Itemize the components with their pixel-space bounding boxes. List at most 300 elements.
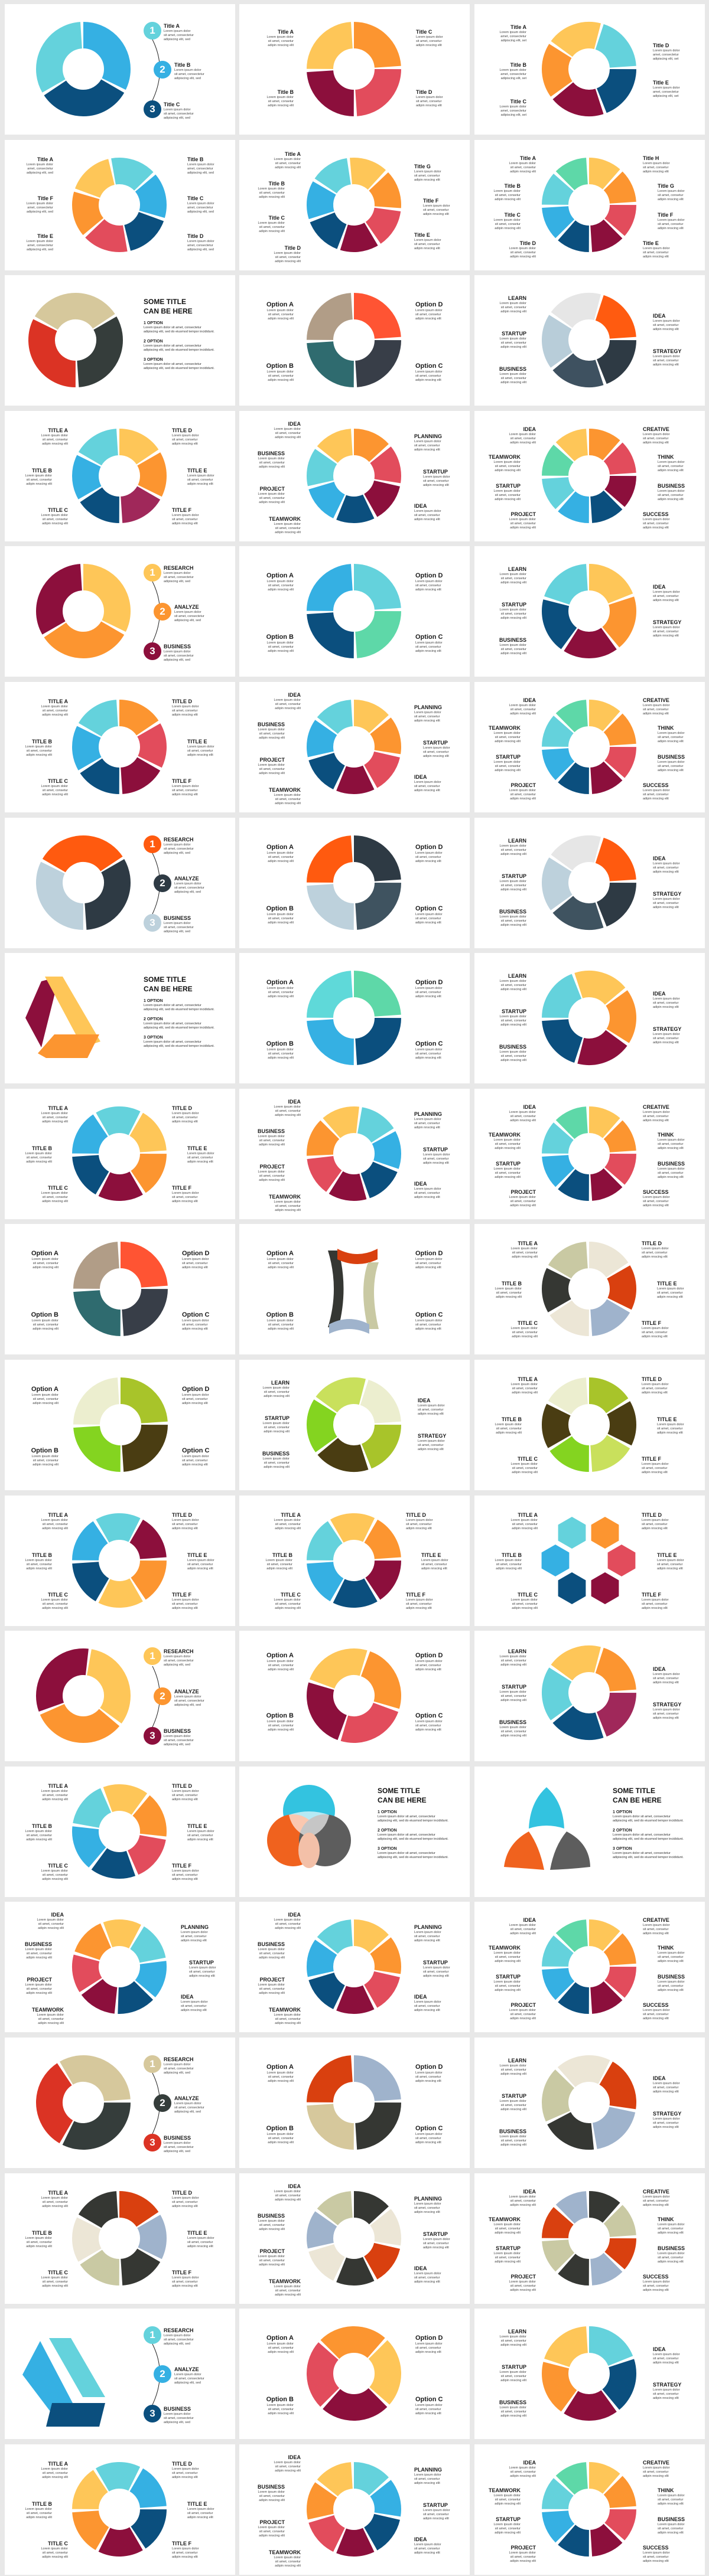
label: Title A: Lorem ipsum dolor [164, 30, 191, 33]
label: IDEA 2: adipin nnscing elit [414, 2280, 440, 2284]
label: Option D: Lorem ipsum dolor [415, 309, 443, 312]
label: Option A: Option A [266, 1652, 294, 1659]
label: STARTUP: adipin nnscing elit [495, 2260, 521, 2264]
label: Title A [499, 24, 526, 43]
slide 10: 6-step swirl [5, 411, 235, 541]
label: Title C [187, 195, 214, 214]
label: TITLE F: sit amet, consetur [172, 1873, 197, 1877]
label: STRATEGY: Lorem ipsum dolor [653, 626, 680, 629]
label: IDEA: Lorem ipsum dolor [653, 590, 680, 594]
label: IDEA: IDEA [51, 1912, 64, 1918]
label: TITLE C [510, 1456, 538, 1474]
label: TITLE A [41, 1783, 68, 1801]
label: BUSINESS [258, 1941, 285, 1960]
label: STRATEGY: sit amet, consetur [653, 630, 678, 634]
label: PROJECT: PROJECT [510, 2274, 536, 2280]
label: Option C: Option C [415, 1311, 443, 1318]
label: Title A: Title A [278, 29, 294, 35]
label: Option A [266, 1250, 294, 1269]
label: Option C: sit amet, consetur [415, 917, 441, 920]
label: TEAMWORK: adipin nnscing elit [275, 802, 301, 805]
label: Option A: adipin nnscing elit [268, 1266, 294, 1269]
label: IDEA 2: Lorem ipsum dolor [414, 2543, 441, 2546]
label: ANALYZE: ANALYZE [174, 2366, 199, 2372]
number 2 [154, 61, 171, 79]
label: STARTUP: adipin nnscing elit [500, 2379, 526, 2382]
label: IDEA: IDEA [653, 2075, 666, 2081]
label: ANALYZE: sit amet, consectetur [174, 615, 204, 618]
label: IDEA: Lorem ipsum dolor [274, 698, 301, 702]
label: TITLE A: adipin nnscing elit [42, 2205, 68, 2208]
label: SUCCESS: Lorem ipsum dolor [643, 2280, 670, 2284]
ring diagram [474, 953, 705, 1083]
label: TITLE B: sit amet, consetur [27, 478, 52, 482]
label: PLANNING: Lorem ipsum dolor [414, 2202, 441, 2206]
label: TITLE A [274, 1512, 301, 1530]
label: Title D: sit amet, consetur [510, 251, 536, 254]
label: PROJECT: adipin nnscing elit [510, 2288, 536, 2292]
label: CREATIVE: Lorem ipsum dolor [643, 2195, 670, 2199]
label: Option B: Option B [266, 2125, 294, 2132]
label: BUSINESS: BUSINESS [499, 366, 526, 372]
slide 30: 6 petal ring [474, 1224, 705, 1354]
label: TITLE B: TITLE B [32, 2501, 52, 2507]
label: TITLE F: Lorem ipsum dolor [642, 1327, 669, 1330]
label: STARTUP: sit amet, consetur [501, 1695, 526, 1698]
title and options: adipiscing elit, sed do eiusmod tempor incididunt. [378, 1818, 448, 1822]
number 3: 3 [149, 1730, 155, 1741]
label: TITLE E: Lorem ipsum dolor [187, 474, 214, 478]
label: PROJECT: adipin nnscing elit [510, 2559, 536, 2563]
ring diagram [5, 1224, 235, 1354]
label: BUSINESS [499, 1044, 526, 1062]
label: Option C: adipin nnscing elit [415, 1327, 441, 1331]
label: Title C [416, 29, 443, 47]
label: PROJECT: sit amet, consetur [259, 768, 285, 771]
label: STARTUP: adipin nnscing elit [495, 769, 521, 772]
label: THINK: adipin nnscing elit [658, 2502, 684, 2506]
label: Option C: sit amet, consetur [415, 1323, 441, 1327]
label: SUCCESS: SUCCESS [643, 2545, 669, 2551]
label: ANALYZE: Lorem ipsum dolor [174, 2373, 201, 2376]
label: Option B [31, 1447, 58, 1467]
title and options: 1 OPTION [613, 1810, 632, 1814]
label: BUSINESS [658, 2516, 685, 2535]
label: PROJECT: Lorem ipsum dolor [509, 2551, 536, 2555]
label: BUSINESS: adipin nnscing elit [259, 465, 285, 469]
label: TEAMWORK: TEAMWORK [269, 787, 301, 793]
label: Option D: adipin nnscing elit [415, 1668, 441, 1671]
label: Title C: Title C [505, 212, 521, 218]
slide 33: 6 green waves [474, 1360, 705, 1490]
label: TITLE C: adipin nnscing elit [42, 793, 68, 796]
label: TITLE C [41, 1592, 68, 1610]
label: PLANNING: adipin nnscing elit [414, 2211, 440, 2214]
label: PLANNING [181, 1924, 209, 1942]
label: Title D: sit amet, consetur [275, 256, 301, 259]
title and options: adipiscing elit, sed do eiusmod tempor incididunt. [144, 1026, 214, 1030]
label: STARTUP: Lorem ipsum dolor [262, 1422, 290, 1425]
label: Option B: adipin nnscing elit [32, 1327, 58, 1331]
label: BUSINESS [164, 644, 194, 662]
label: Option B: adipin nnscing elit [268, 1728, 294, 1732]
label: IDEA: IDEA [523, 1917, 536, 1923]
label: STARTUP: Lorem ipsum dolor [423, 475, 450, 479]
title and options: 2 OPTION [378, 1829, 397, 1833]
label: Title F [658, 212, 685, 230]
label: TITLE C: TITLE C [48, 2541, 68, 2546]
label: IDEA: adipin nnscing elit [275, 1927, 301, 1930]
label: IDEA 2: Lorem ipsum dolor [414, 2272, 441, 2275]
label: LEARN: sit amet, consetur [501, 2068, 526, 2072]
label: Option C [415, 1040, 443, 1060]
label: TITLE F: sit amet, consetur [642, 1331, 667, 1334]
label: PROJECT [258, 1164, 285, 1182]
label: STARTUP: Lorem ipsum dolor [189, 1966, 216, 1970]
label: Title G: Title G [658, 183, 674, 189]
label: IDEA 2: adipin nnscing elit [414, 2009, 440, 2012]
label: SUCCESS: SUCCESS [643, 2002, 669, 2008]
label: Option C: sit amet, consetur [415, 1724, 441, 1728]
label: TITLE C: TITLE C [518, 1592, 538, 1598]
label: STARTUP: sit amet, consetur [501, 1019, 526, 1023]
label: LEARN: adipin nnscing elit [500, 1663, 526, 1667]
slide 50: 7 swirl [239, 2173, 470, 2304]
label: TITLE C [41, 507, 68, 525]
label: TITLE F: adipin nnscing elit [172, 793, 198, 796]
label: PROJECT: adipin nnscing elit [259, 501, 285, 504]
slide 18: 8-piece puzzle [474, 682, 705, 812]
label: TEAMWORK: Lorem ipsum dolor [493, 1138, 521, 1142]
label: THINK: THINK [658, 2487, 674, 2493]
label: THINK: sit amet, consetur [658, 2227, 683, 2231]
title and options: Lorem ipsum dolor sit amet, consectetur [378, 1852, 435, 1855]
label: Title B: Title B [269, 181, 285, 187]
label: STARTUP: STARTUP [496, 1974, 521, 1980]
number 1 [144, 835, 161, 853]
label: TITLE B: Lorem ipsum dolor [495, 1287, 522, 1291]
label: THINK: adipin nnscing elit [658, 740, 684, 743]
label: IDEA: adipin nnscing elit [653, 870, 679, 874]
label: TITLE A: sit amet, consetur [43, 2200, 68, 2204]
label: THINK: THINK [658, 2216, 674, 2222]
label: TITLE F [642, 1320, 669, 1338]
label: Option C: Option C [415, 634, 443, 641]
label: ANALYZE [174, 2366, 204, 2385]
label: PROJECT: sit amet, consetur [510, 793, 536, 796]
slide 3: 5-step ring [474, 4, 705, 135]
label: TITLE A: TITLE A [48, 1105, 68, 1111]
label: IDEA 2: IDEA [414, 2536, 427, 2542]
label: TITLE E: adipin nnscing elit [657, 1295, 683, 1299]
label: IDEA 2: sit amet, consetur [414, 2276, 440, 2280]
label: TITLE D: sit amet, consetur [172, 2471, 197, 2475]
label: BUSINESS: sit amet, consectetur [164, 654, 194, 658]
label: TITLE D: Lorem ipsum dolor [642, 1247, 669, 1251]
label: TITLE A [41, 2190, 68, 2208]
label: Option D: sit amet, consetur [415, 584, 441, 587]
label: TITLE E: sit amet, consetur [187, 1834, 213, 1837]
label: LEARN: LEARN [271, 1380, 290, 1386]
label: PLANNING: sit amet, consetur [414, 715, 440, 719]
label: TEAMWORK [489, 454, 521, 472]
label: Option A: adipin nnscing elit [268, 588, 294, 592]
label: TITLE E [187, 739, 214, 757]
slide 53: 4 blocks options [239, 2309, 470, 2439]
label: Option A: adipin nnscing elit [268, 995, 294, 998]
label: STARTUP: sit amet, consetur [501, 884, 526, 887]
label: ANALYZE: sit amet, consectetur [174, 886, 204, 890]
label: LEARN: LEARN [508, 566, 526, 572]
label: LEARN [499, 566, 526, 585]
label: LEARN: sit amet, consetur [264, 1390, 290, 1394]
label: Option D: Option D [415, 1652, 443, 1659]
label: IDEA 2: IDEA [414, 1994, 427, 2000]
label: TITLE F [172, 1863, 199, 1881]
label: THINK [658, 1945, 685, 1963]
title and options: adipiscing elit, sed do eiusmod tempor incididunt. [144, 329, 214, 333]
label: Title D [416, 89, 443, 107]
label: IDEA 2: adipin nnscing elit [414, 789, 440, 792]
label: STARTUP: Lorem ipsum dolor [493, 489, 521, 493]
label: Title E: sit amet, consetur [414, 243, 440, 246]
label: Option C: adipin nnscing elit [182, 1327, 208, 1331]
label: BUSINESS: adipin nnscing elit [658, 1176, 684, 1179]
label: Option C: sit amet, consetur [415, 2137, 441, 2140]
label: Title C: adipiscing elit, sed [164, 116, 190, 120]
label: CREATIVE [643, 426, 670, 445]
label: Option B: Lorem ipsum dolor [266, 2133, 294, 2136]
label: TITLE D: adipin nnscing elit [642, 1527, 668, 1530]
title and options: Lorem ipsum dolor sit amet, consectetur [144, 326, 201, 329]
title and options: adipiscing elit, sed do eiusmod tempor incididunt. [144, 1007, 214, 1011]
label: BUSINESS: Lorem ipsum dolor [258, 457, 285, 461]
label: TITLE A: Lorem ipsum dolor [41, 705, 68, 709]
label: STRATEGY: STRATEGY [653, 891, 681, 897]
label: Option D [415, 2335, 443, 2354]
label: TITLE A: Lorem ipsum dolor [510, 1383, 538, 1386]
label: BUSINESS: BUSINESS [658, 1161, 685, 1167]
label: Title A [26, 156, 53, 175]
label: Option D: Option D [415, 572, 443, 579]
slide 1: 3-step ring with numbered list [5, 4, 235, 135]
label: TITLE C: sit amet, consetur [43, 1602, 68, 1606]
label: PROJECT: Lorem ipsum dolor [258, 2526, 285, 2529]
label: Option C [415, 1311, 443, 1331]
label: IDEA 2: IDEA [181, 1994, 194, 2000]
label: TITLE B: TITLE B [32, 468, 52, 474]
label: TEAMWORK: Lorem ipsum dolor [274, 2285, 301, 2288]
label: Option B: Lorem ipsum dolor [31, 1455, 58, 1458]
label: STARTUP [423, 1960, 450, 1978]
label: IDEA: IDEA [653, 584, 666, 590]
label: Option C: sit amet, consetur [415, 2408, 441, 2411]
slide 21: yin-yang 5 learn [474, 818, 705, 948]
label: TITLE B: adipin nnscing elit [26, 2516, 52, 2519]
label: TITLE E: adipin nnscing elit [657, 1567, 683, 1571]
label: STARTUP: STARTUP [502, 873, 526, 879]
label: TITLE B [25, 1823, 52, 1842]
label: SUCCESS: sit amet, consetur [643, 2555, 668, 2559]
label: SUCCESS: Lorem ipsum dolor [643, 1196, 670, 1199]
label: TITLE A: sit amet, consetur [512, 1251, 538, 1255]
label: STRATEGY: adipin nnscing elit [653, 363, 679, 367]
label: TITLE B: Lorem ipsum dolor [25, 745, 52, 749]
label: Option D: Option D [415, 301, 443, 308]
label: LEARN: Lorem ipsum dolor [499, 2335, 526, 2339]
label: IDEA [509, 1917, 536, 1935]
label: TEAMWORK: sit amet, consetur [38, 2017, 64, 2021]
label: Title D: adipin nnscing elit [510, 255, 536, 259]
label: TITLE B: TITLE B [32, 1145, 52, 1151]
label: TITLE D: adipin nnscing elit [642, 1391, 668, 1395]
label: TITLE F [642, 1456, 669, 1474]
number 2 [154, 2365, 171, 2383]
slide 37: 3 arrows with numbered list [5, 1631, 235, 1761]
number 3 [144, 914, 161, 932]
label: IDEA: sit amet, consetur [653, 1677, 678, 1680]
title and options: Lorem ipsum dolor sit amet, consectetur [378, 1815, 435, 1818]
label: BUSINESS: Lorem ipsum dolor [258, 1135, 285, 1138]
label: IDEA [274, 1099, 301, 1117]
label: Option A: Lorem ipsum dolor [266, 1660, 294, 1663]
label: Option B: sit amet, consetur [268, 1724, 294, 1728]
label: IDEA 2 [414, 774, 441, 792]
label: STARTUP: STARTUP [423, 1147, 448, 1152]
ring diagram [239, 953, 470, 1083]
label: IDEA: Lorem ipsum dolor [653, 2353, 680, 2356]
label: STARTUP: STARTUP [496, 2516, 521, 2522]
label: IDEA: adipin nnscing elit [418, 1412, 444, 1416]
label: IDEA 2: adipin nnscing elit [414, 2551, 440, 2555]
label: TITLE D: sit amet, consetur [642, 1523, 667, 1526]
label: Option C: Lorem ipsum dolor [415, 1319, 443, 1323]
label: STARTUP: sit amet, consetur [423, 479, 448, 483]
label: IDEA: adipin nnscing elit [510, 1932, 536, 1935]
label: Title D [187, 233, 214, 252]
label: BUSINESS: Lorem ipsum dolor [262, 1457, 290, 1461]
label: IDEA: IDEA [288, 2183, 301, 2189]
label: Option D: sit amet, consetur [415, 991, 441, 994]
label: TITLE A: TITLE A [48, 1783, 68, 1789]
label: IDEA [653, 584, 680, 602]
label: Title E [643, 240, 670, 259]
label: Title E: amet, consectetur [27, 244, 53, 247]
slide 44: 7 faceted blocks [239, 1902, 470, 2032]
label: IDEA: sit amet, consetur [510, 1928, 536, 1931]
label: TITLE F: adipin nnscing elit [172, 522, 198, 525]
label: RESEARCH: RESEARCH [164, 565, 194, 571]
label: BUSINESS: Lorem ipsum dolor [658, 489, 685, 493]
label: RESEARCH: Lorem ipsum dolor [164, 2334, 191, 2337]
label: Option B: Option B [31, 1447, 58, 1454]
label: Title E: Lorem ipsum dolor [643, 247, 670, 250]
ring diagram [542, 21, 636, 117]
label: LEARN: Lorem ipsum dolor [499, 302, 526, 305]
label: Option B [266, 634, 294, 653]
label: STARTUP: Lorem ipsum dolor [499, 337, 526, 341]
title and options: adipiscing elit, sed do eiusmod tempor incididunt. [613, 1818, 684, 1822]
label: TITLE D [172, 1783, 199, 1801]
title and options: Lorem ipsum dolor sit amet, consectetur [613, 1852, 671, 1855]
label: TITLE E: TITLE E [421, 1552, 441, 1558]
label: STARTUP: adipin nnscing elit [500, 888, 526, 892]
label: STARTUP: adipin nnscing elit [423, 755, 449, 758]
venn diagram [239, 1767, 470, 1897]
label: TITLE F: Lorem ipsum dolor [642, 1462, 669, 1466]
petals diagram [474, 1767, 705, 1897]
label: IDEA: adipin nnscing elit [275, 707, 301, 710]
label: LEARN: adipin nnscing elit [500, 2072, 526, 2076]
label: TITLE A: TITLE A [518, 1512, 538, 1518]
label: TITLE C: Lorem ipsum dolor [41, 2547, 68, 2551]
slide 14: 4-piece puzzle [239, 546, 470, 677]
label: TITLE B: adipin nnscing elit [266, 1567, 292, 1571]
label: CREATIVE: sit amet, consetur [643, 1928, 668, 1931]
label: LEARN [499, 2058, 526, 2076]
label: PROJECT: Lorem ipsum dolor [258, 492, 285, 496]
label: TITLE D: TITLE D [406, 1512, 426, 1518]
ring diagram [5, 1089, 235, 1219]
title and options: Lorem ipsum dolor sit amet, consectetur [144, 1022, 201, 1026]
label: IDEA 2: IDEA [414, 503, 427, 509]
label: Title E: Lorem ipsum dolor [26, 240, 53, 243]
label: Option B: adipin nnscing elit [268, 921, 294, 925]
label: STARTUP: adipin nnscing elit [423, 2246, 449, 2249]
label: BUSINESS: Lorem ipsum dolor [658, 1167, 685, 1171]
label: STARTUP: STARTUP [496, 2245, 521, 2251]
number 1 [144, 2055, 161, 2073]
label: PLANNING: adipin nnscing elit [414, 1939, 440, 1942]
label: Option D: Option D [182, 1250, 209, 1257]
label: BUSINESS: adipin nnscing elit [658, 2260, 684, 2264]
label: TITLE D: sit amet, consetur [642, 1251, 667, 1255]
label: PLANNING: Lorem ipsum dolor [414, 1118, 441, 1121]
label: TITLE F: Lorem ipsum dolor [172, 514, 199, 517]
label: TITLE C: Lorem ipsum dolor [41, 1191, 68, 1195]
label: CREATIVE [643, 1917, 670, 1935]
label: THINK: Lorem ipsum dolor [658, 1951, 685, 1955]
label: Option B: Option B [266, 1712, 294, 1719]
label: Title B: adipin nnscing elit [268, 104, 294, 107]
label: BUSINESS: sit amet, consetur [501, 1730, 526, 1733]
label: IDEA 2: Lorem ipsum dolor [414, 1187, 441, 1191]
label: Option C [415, 2125, 443, 2144]
label: TITLE E: TITLE E [187, 468, 207, 474]
label: TITLE A [41, 1512, 68, 1530]
title and options: Lorem ipsum dolor sit amet, consectetur [144, 344, 201, 348]
label: TITLE A: adipin nnscing elit [42, 1120, 68, 1124]
label: STRATEGY: sit amet, consetur [653, 1712, 678, 1716]
label: Title E: Lorem ipsum dolor [653, 86, 680, 90]
label: IDEA: IDEA [653, 1666, 666, 1672]
label: TITLE F [172, 2270, 199, 2288]
label: TEAMWORK: sit amet, consetur [275, 2560, 301, 2564]
label: BUSINESS [25, 1941, 52, 1960]
title and options: CAN BE HERE [613, 1796, 662, 1804]
label: BUSINESS [658, 754, 685, 772]
label: Option A: Lorem ipsum dolor [31, 1258, 58, 1261]
label: TITLE F: Lorem ipsum dolor [172, 2276, 199, 2280]
label: TITLE F: TITLE F [172, 507, 191, 513]
label: STARTUP: adipin nnscing elit [189, 1974, 215, 1978]
label: CREATIVE: CREATIVE [643, 2460, 669, 2466]
label: TITLE D: adipin nnscing elit [172, 1120, 198, 1124]
label: PROJECT: PROJECT [510, 782, 536, 788]
label: Title A: Lorem ipsum dolor [274, 158, 301, 161]
label: TITLE F [172, 1592, 199, 1610]
label: LEARN: sit amet, consetur [501, 2339, 526, 2343]
